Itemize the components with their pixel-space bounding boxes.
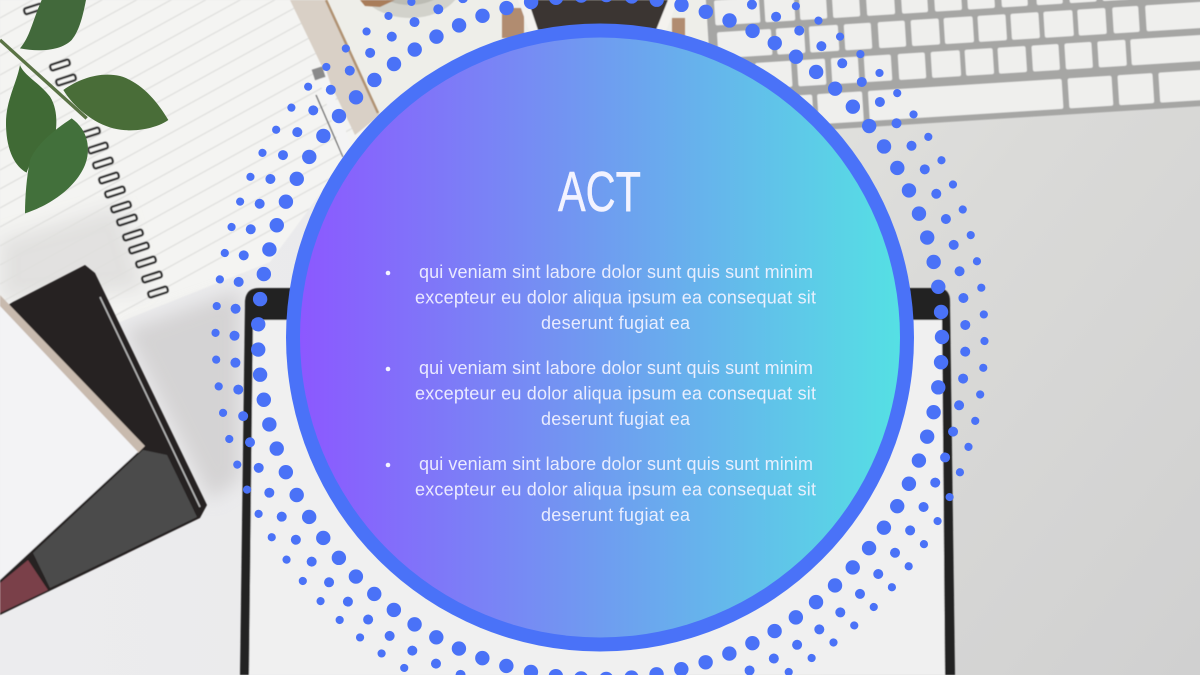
leaf: right: [63, 75, 168, 130]
photo: keyboard: [702, 0, 1200, 137]
keyboard keys: [710, 0, 1200, 130]
white paper on the book: [0, 306, 138, 580]
bullet item 1: excepteur eu dolor aliqua ipsum ea consequat sit: [415, 288, 816, 308]
photo: clipboard: [240, 288, 955, 675]
bullet item 2: deserunt fugiat ea: [541, 409, 691, 429]
background desk right shading: [680, 0, 1200, 675]
bullet item 1: [386, 262, 816, 333]
bullet list: [386, 262, 816, 525]
beige page edge: [0, 295, 145, 453]
bullet item 3: deserunt fugiat ea: [541, 505, 691, 525]
main disc gradient: [300, 38, 900, 638]
photo: desk shadow beside leather book: [125, 290, 240, 500]
leather textured panel: [33, 450, 197, 588]
bullet item 2: qui veniam sint labore dolor sunt quis sunt minim: [419, 358, 813, 378]
photo: notebook: [0, 0, 369, 321]
halftone dot ring: outer: [211, 0, 989, 675]
leaf: lower: [25, 118, 88, 213]
stem: [0, 40, 87, 118]
notebook ruled lines: [0, 0, 352, 316]
halftone dot ring: middle: [220, 0, 980, 675]
bullet item 1: deserunt fugiat ea: [541, 313, 691, 333]
desk top strip: [320, 0, 720, 120]
leaf: top: [20, 0, 86, 50]
photo: coffee mug: [502, 0, 685, 38]
bullet item 3: qui veniam sint labore dolor sunt quis sunt minim: [419, 454, 813, 474]
title: ACT: [558, 160, 641, 224]
maroon strap: [0, 560, 48, 613]
photo: leather book: [0, 265, 207, 615]
photo: glass dish with pencils: [358, 0, 462, 18]
photo: wooden strip and pen: [290, 0, 380, 158]
notebook shadow: [0, 205, 145, 300]
photo: plant with leaves: [0, 0, 168, 213]
main disc border: [286, 24, 914, 652]
bullet item 3: [386, 454, 816, 525]
notebook spiral binding: [24, 3, 168, 298]
bullet item 1: qui veniam sint labore dolor sunt quis sunt minim: [419, 262, 813, 282]
halftone dot ring: inner: [258, 0, 942, 675]
bullet item 3: excepteur eu dolor aliqua ipsum ea consequat sit: [415, 480, 816, 500]
bullet item 2: [386, 358, 816, 429]
bullet item 2: excepteur eu dolor aliqua ipsum ea consequat sit: [415, 384, 816, 404]
leaf: left: [6, 65, 56, 173]
